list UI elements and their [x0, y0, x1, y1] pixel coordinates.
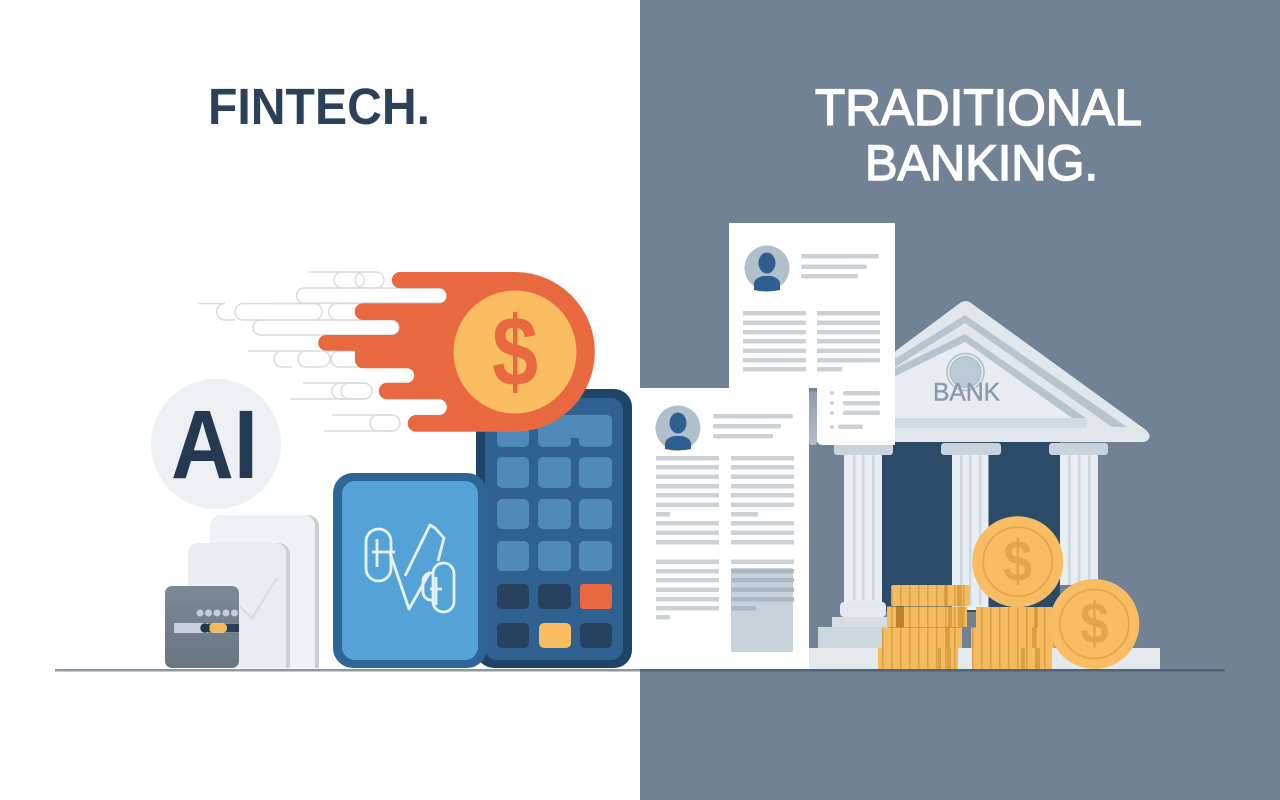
text lines: back document	[743, 254, 880, 429]
text lines: front document	[656, 414, 794, 620]
title: fintech: FINTECH.	[208, 78, 430, 135]
icon: gold coin upper: $	[1003, 528, 1032, 594]
icon: tablet with chart symbol	[333, 473, 487, 668]
bank pediment	[780, 301, 1150, 442]
avatar: back document	[744, 246, 790, 292]
bank columns	[834, 443, 1108, 610]
icon: stacked papers with device	[165, 515, 319, 668]
bank steps	[809, 602, 1160, 669]
bank portico	[882, 442, 1060, 612]
icon: speed lines	[198, 272, 446, 431]
ground line: left	[55, 669, 640, 672]
icon: calculator	[476, 389, 632, 668]
icon: flying dollar coin: $	[492, 296, 538, 407]
ground line: right	[640, 669, 1225, 672]
table box: front document	[731, 568, 794, 652]
document: front	[640, 388, 809, 669]
bank label: BANK	[933, 378, 1000, 406]
title: traditional banking	[815, 79, 1142, 191]
panel: fintech background	[0, 0, 640, 800]
bank medallion	[947, 354, 984, 390]
icon: gold coin lower	[1049, 579, 1139, 669]
panel: traditional banking background	[640, 0, 1280, 800]
coin stack: left	[878, 585, 970, 669]
shadow strip between documents	[809, 391, 817, 445]
icon: flying dollar coin	[318, 272, 595, 432]
document: back	[729, 223, 895, 445]
icon: gold coin upper	[972, 516, 1063, 607]
coin stack: right	[971, 607, 1055, 669]
title: traditional banking: BANKING.	[865, 135, 1098, 191]
bank building	[780, 301, 1160, 669]
avatar: front document	[656, 406, 700, 450]
icon: AI badge	[151, 379, 281, 509]
title: traditional banking: TRADITIONAL	[815, 79, 1142, 136]
icon: gold coin lower: $	[1080, 590, 1109, 656]
icon: AI badge: AI	[171, 390, 258, 499]
